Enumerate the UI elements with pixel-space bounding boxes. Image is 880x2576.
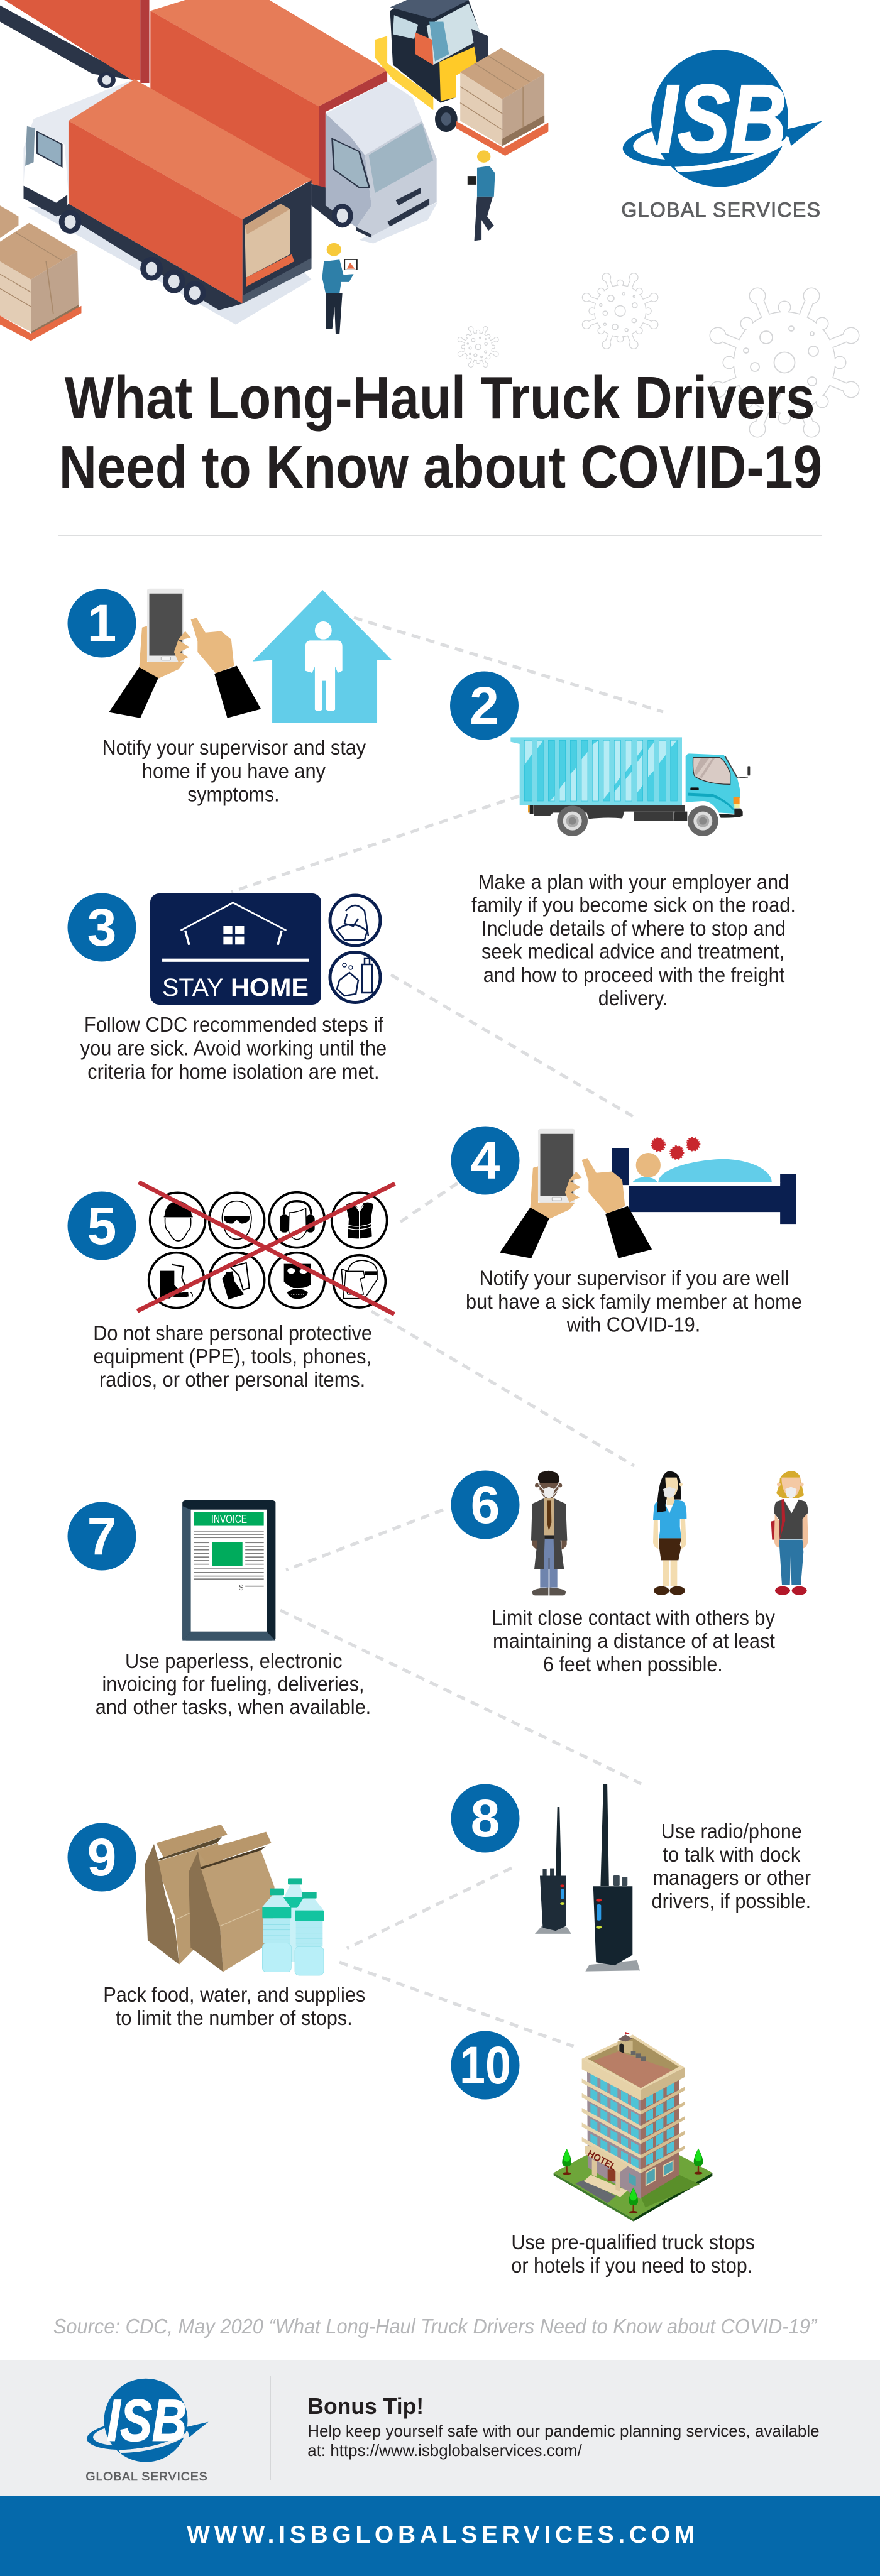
text: step 2: delivery. <box>598 986 668 1010</box>
red cross <box>137 1182 395 1314</box>
trees <box>562 2149 571 2175</box>
text: step 8: Use radio/phone <box>661 1820 802 1843</box>
icon: two-way radios <box>535 1784 640 1972</box>
walls <box>587 2071 641 2199</box>
woman in blue <box>657 1471 681 1512</box>
bonus tip text: Help keep yourself safe with our pandemic planning services, available <box>307 2421 820 2440</box>
text: step 4: but have a sick family member at home <box>466 1290 802 1313</box>
badge 6: 6 <box>471 1475 500 1534</box>
text: step 5: equipment (PPE), tools, phones, <box>93 1345 371 1368</box>
text: step 5: Do not share personal protective <box>93 1321 372 1345</box>
ear protection <box>289 1208 306 1240</box>
text: step 3: you are sick. Avoid working until the <box>80 1037 387 1059</box>
badge 1 <box>68 589 136 657</box>
logo: footer: ISB <box>107 2388 187 2453</box>
worker 1 <box>477 150 490 163</box>
icon: sick person in bed <box>612 1138 796 1224</box>
badge 9: 9 <box>87 1828 116 1887</box>
ground <box>554 2130 712 2219</box>
left pallet <box>0 205 18 238</box>
source line: Source: CDC, May 2020 “What Long-Haul Truck Drivers Need to Know about COVID-19” <box>53 2315 818 2338</box>
icon: tablet with invoice: INVOICE <box>211 1513 247 1525</box>
badge 5 <box>68 1191 136 1260</box>
logo: ISB Global Services: ISB <box>656 65 787 173</box>
logo: footer: GLOBAL SERVICES <box>85 2470 207 2484</box>
text: step 4 <box>466 1267 802 1336</box>
text: step 8: managers or other <box>652 1866 811 1889</box>
icon: cough into elbow <box>330 895 380 946</box>
safety glasses <box>222 1201 251 1239</box>
icon: tablet with invoice <box>182 1500 275 1641</box>
badge 8 <box>451 1784 519 1852</box>
text: step 7: and other tasks, when available. <box>96 1695 371 1718</box>
text: step 3 <box>80 1013 387 1083</box>
panel: bonus tip <box>0 2360 880 2496</box>
safety vest <box>346 1203 373 1238</box>
right bottle <box>302 1892 317 1899</box>
badge 6 <box>451 1470 519 1539</box>
text: step 1: home if you have any <box>142 760 326 783</box>
badge 3: 3 <box>87 898 116 957</box>
bonus tip text <box>307 2393 820 2460</box>
badge 9 <box>68 1823 136 1891</box>
entrance <box>629 2173 636 2186</box>
text: step 6: Limit close contact with others by <box>492 1606 775 1629</box>
bonus tip text: at: https://www.isbglobalservices.com/ <box>307 2441 583 2460</box>
gas mask <box>284 1264 311 1288</box>
roof <box>582 2059 641 2100</box>
footer bar: website <box>0 2496 880 2576</box>
windows <box>590 2073 674 2170</box>
icon: house with person <box>253 590 392 723</box>
text: step 9: to limit the number of stops. <box>116 2006 353 2029</box>
icon: stay home sign: HOME <box>231 974 309 1001</box>
icons: personal protective equipment crossed out <box>137 1182 395 1314</box>
badge 4: 4 <box>471 1131 500 1190</box>
text: step 2: Make a plan with your employer and <box>478 870 789 893</box>
text: step 2: family if you become sick on the road. <box>471 893 796 917</box>
floor bands <box>582 2078 685 2115</box>
icon: delivery truck <box>510 737 750 836</box>
text: step 10: Use pre-qualified truck stops <box>511 2230 755 2254</box>
icon: phone and hands <box>109 589 261 718</box>
footer bar: website: WWW.ISBGLOBALSERVICES.COM <box>187 2521 695 2548</box>
worker 2 <box>327 243 341 256</box>
text: step 10 <box>511 2230 755 2277</box>
boots <box>172 1265 189 1288</box>
badge 4 <box>451 1126 519 1195</box>
logo: ISB Global Services <box>621 50 822 221</box>
text: step 7: Use paperless, electronic <box>125 1649 342 1673</box>
back bottle <box>288 1878 302 1884</box>
dashed connector lines <box>231 618 663 2046</box>
icon: three people with masks <box>531 1471 808 1595</box>
badge 1: 1 <box>87 594 116 653</box>
text: step 1: symptoms. <box>187 782 280 805</box>
bonus tip text: Bonus Tip! <box>307 2393 424 2419</box>
text: step 6: 6 feet when possible. <box>543 1652 723 1676</box>
text: step 2: seek medical advice and treatment, <box>481 940 784 963</box>
icons: decorative virus outlines <box>459 275 855 433</box>
text: step 8: drivers, if possible. <box>652 1889 811 1913</box>
text: step 8 <box>652 1820 811 1913</box>
text: step 4: Notify your supervisor if you are well <box>479 1267 789 1290</box>
logo: ISB Global Services: GLOBAL SERVICES <box>621 199 820 221</box>
text: step 9 <box>103 1983 365 2029</box>
text: step 8: to talk with dock <box>663 1843 801 1866</box>
text: step 6 <box>492 1606 775 1676</box>
text: step 5: radios, or other personal items. <box>99 1368 365 1391</box>
icon: paper bags and water bottles <box>145 1825 324 1975</box>
gloves <box>231 1263 250 1290</box>
badge 2 <box>450 671 519 740</box>
icon: hotel building: HOTEL <box>585 2148 618 2173</box>
text: step 7 <box>96 1649 371 1718</box>
text: step 1: Notify your supervisor and stay <box>102 736 366 759</box>
text: step 7: invoicing for fueling, deliveries, <box>102 1673 365 1695</box>
badge 10: 10 <box>459 2036 511 2095</box>
text: step 3: Follow CDC recommended steps if <box>84 1013 384 1036</box>
illustration: trucks and warehouse workers <box>0 0 548 341</box>
text: step 2: Include details of where to stop and <box>481 917 786 940</box>
man <box>535 1483 539 1487</box>
icon: hotel building <box>554 2032 712 2222</box>
text: step 9: Pack food, water, and supplies <box>103 1983 365 2006</box>
title <box>59 364 822 501</box>
text: step 2 <box>471 870 796 1010</box>
text: step 4: with COVID-19. <box>566 1313 700 1336</box>
hard hat <box>165 1218 191 1241</box>
badge 2: 2 <box>470 676 499 735</box>
left bottle <box>270 1889 284 1895</box>
forklift <box>375 36 433 110</box>
right pallet <box>460 48 544 99</box>
text: step 6: maintaining a distance of at least <box>493 1629 775 1652</box>
text: step 3: criteria for home isolation are met. <box>87 1060 380 1083</box>
badge 3 <box>68 893 136 961</box>
icon: stay home sign <box>150 893 321 1005</box>
icon: hand washing <box>330 952 380 1003</box>
badge 5: 5 <box>87 1196 116 1255</box>
text: step 1 <box>102 736 366 805</box>
logo: footer <box>85 2379 209 2484</box>
badge 7 <box>68 1502 136 1571</box>
badge 8: 8 <box>471 1789 500 1848</box>
face shield <box>341 1260 377 1299</box>
text: step 2: and how to proceed with the freight <box>483 963 784 986</box>
text: step 5 <box>93 1321 372 1391</box>
badge 7: 7 <box>87 1507 116 1566</box>
icon: tablet with invoice: $ <box>239 1583 244 1592</box>
text: step 10: or hotels if you need to stop. <box>511 2254 752 2277</box>
woman in grey <box>776 1471 804 1498</box>
icon: stay home sign: STAY <box>162 974 223 1001</box>
icon: phone and hands <box>500 1129 652 1258</box>
